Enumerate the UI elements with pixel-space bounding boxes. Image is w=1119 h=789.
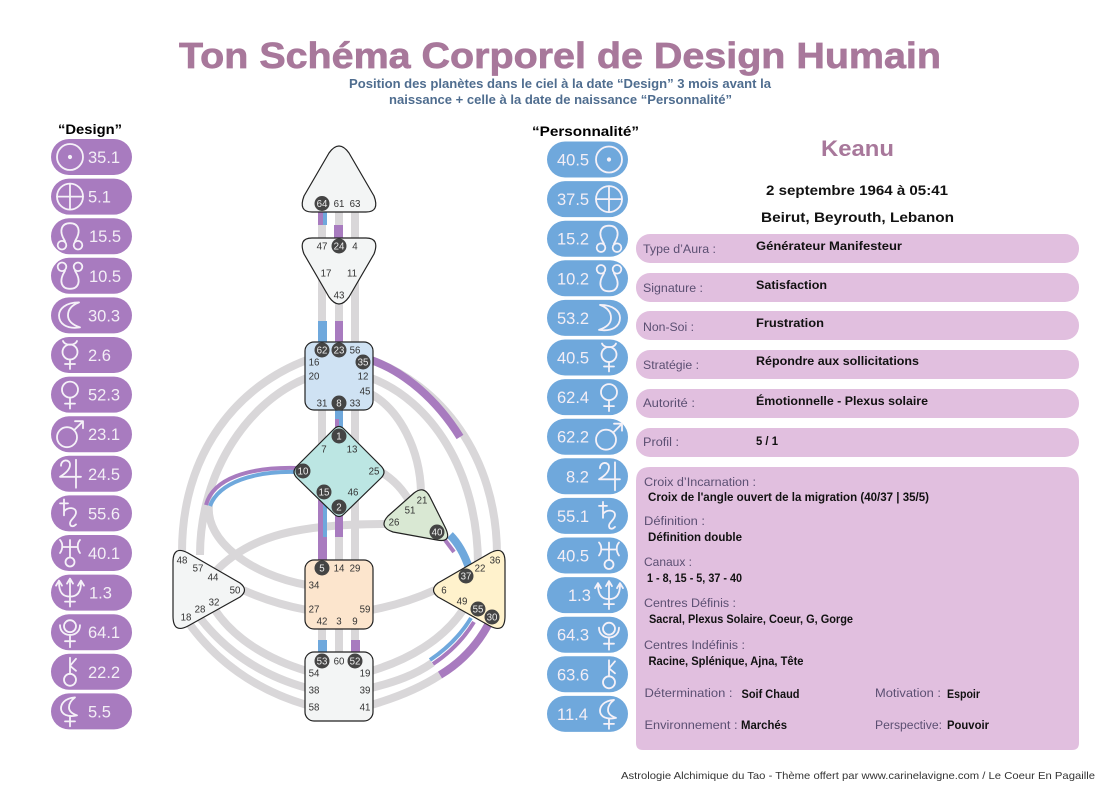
row: autorité: Autorité : <box>643 396 695 410</box>
gate numbers: 54 <box>309 668 320 680</box>
row: non-soi <box>636 311 1079 340</box>
pill: South Node 10.2: 10.2 <box>557 270 589 288</box>
pill: Jupiter 8.2 <box>547 458 628 494</box>
gate numbers: 25 <box>369 466 379 478</box>
pill: Venus 52.3 <box>51 377 132 413</box>
panel: details: Définition : <box>644 514 705 528</box>
column: Design planets <box>51 139 132 729</box>
subtitle: Position des planètes dans le ciel à la date “Design” 3 mois avant la <box>349 77 772 91</box>
panel: details: Détermination : <box>644 686 732 700</box>
pill: Saturn 55.1 <box>547 498 628 534</box>
pill: Pluto 64.3 <box>547 617 628 653</box>
pill: Lilith 11.4: 11.4 <box>557 706 588 724</box>
gate numbers: 29 <box>350 564 360 574</box>
row: profil: 5 / 1 <box>756 435 779 448</box>
row: type <box>636 234 1079 263</box>
pill: Moon 30.3 <box>51 297 132 333</box>
gate numbers: 30 <box>487 612 498 624</box>
panel: details: 1 - 8, 15 - 5, 37 - 40 <box>647 572 742 585</box>
gate numbers: 21 <box>417 496 427 506</box>
centre: root <box>305 652 373 721</box>
activation: gate 52 <box>351 640 360 653</box>
gate numbers: 18 <box>181 612 191 624</box>
panel: details: Racine, Splénique, Ajna, Tête <box>648 655 804 668</box>
pill: Uranus 40.1: 40.1 <box>88 545 120 563</box>
panel: details: Croix de l'angle ouvert de la migration (40/37 | 35/5) <box>648 491 929 504</box>
row: non-soi: Non-Soi : <box>643 320 694 334</box>
pill: South Node 10.5: 10.5 <box>89 268 121 286</box>
gate numbers: 48 <box>177 556 187 566</box>
row: stratégie: Stratégie : <box>643 358 699 372</box>
panel: details: Motivation : <box>875 686 941 700</box>
pill: Mercury 2.6 <box>51 337 132 373</box>
gate numbers: 11 <box>347 268 357 280</box>
activation: channel 1-8 <box>335 410 343 430</box>
gate numbers: 36 <box>490 556 500 566</box>
pill: Mercury 2.6: 2.6 <box>88 347 111 365</box>
pill: Mars 62.2 <box>547 419 628 455</box>
gate numbers: 43 <box>334 290 344 302</box>
pill: Chiron 22.2 <box>51 654 132 690</box>
gate numbers <box>177 196 500 714</box>
bodygraph chart <box>173 146 505 721</box>
gate numbers: 6 <box>441 586 447 596</box>
row: type: Type d’Aura : <box>643 242 716 256</box>
gate numbers: 42 <box>317 616 327 628</box>
gate numbers: 51 <box>405 506 415 516</box>
gate numbers: 62 <box>317 346 327 356</box>
pill: North Node 15.5 <box>51 218 132 254</box>
gate numbers: 14 <box>334 564 345 574</box>
centre: heart <box>384 490 448 540</box>
pill: Pluto 64.1 <box>51 614 132 650</box>
pill: Neptune 1.3: 1.3 <box>568 587 591 605</box>
pill: Mars 62.2: 62.2 <box>557 429 589 447</box>
gate numbers: 8 <box>336 398 342 410</box>
activation: gate 2 <box>335 510 343 537</box>
pill: Mars 23.1 <box>51 416 132 452</box>
gate numbers: 32 <box>209 598 219 608</box>
panel: details <box>636 467 1079 750</box>
profile name: Keanu <box>821 136 894 161</box>
gate numbers: 22 <box>475 564 485 574</box>
pill: Chiron 63.6 <box>547 656 628 692</box>
centre: sacral <box>305 560 373 629</box>
centre: head <box>302 146 376 212</box>
panel: details: Centres Définis : <box>644 596 736 610</box>
pill: Mars 23.1: 23.1 <box>88 426 120 444</box>
row: type: Générateur Manifesteur <box>756 240 903 253</box>
pill: Moon 30.3: 30.3 <box>88 307 120 325</box>
pill: Jupiter 8.2: 8.2 <box>566 468 589 486</box>
gate numbers: 50 <box>230 586 241 596</box>
pill: Saturn 55.1: 55.1 <box>557 508 589 526</box>
gate numbers: 19 <box>360 668 370 680</box>
centre: spleen <box>173 550 244 628</box>
pill: Earth 37.5: 37.5 <box>557 191 589 209</box>
panel: details: Croix d’Incarnation : <box>644 475 756 489</box>
panel: details: Définition double <box>648 531 743 544</box>
pill: Jupiter 24.5: 24.5 <box>88 466 120 484</box>
gate numbers: 10 <box>298 466 309 478</box>
gate numbers: 5 <box>319 564 325 574</box>
gate numbers: 7 <box>321 444 327 456</box>
row: profil: Profil : <box>643 435 679 449</box>
gate numbers: 4 <box>352 242 358 252</box>
row: signature: Signature : <box>643 281 703 295</box>
gate numbers: 2 <box>336 502 342 514</box>
subtitle <box>349 77 772 107</box>
gate numbers: 61 <box>334 199 344 210</box>
gate numbers: 23 <box>334 346 344 356</box>
pill: Chiron 63.6: 63.6 <box>557 666 589 684</box>
row: autorité: Émotionnelle - Plexus solaire <box>756 395 929 408</box>
pill: Jupiter 24.5 <box>51 456 132 492</box>
pill: North Node 15.2: 15.2 <box>557 231 589 249</box>
gate numbers: 49 <box>457 596 467 608</box>
birth place: Beirut, Beyrouth, Lebanon <box>761 209 954 225</box>
pill: South Node 10.2 <box>547 260 628 296</box>
pill: Pluto 64.1: 64.1 <box>88 624 120 642</box>
panel: details: Espoir <box>947 688 980 701</box>
pill: Sun 35.1: 35.1 <box>88 149 120 167</box>
gate numbers: 64 <box>317 199 328 210</box>
pill: Lilith 11.4 <box>547 696 628 732</box>
activation: gate 30 <box>440 625 488 675</box>
row: profil <box>636 428 1079 457</box>
pill: Earth 5.1 <box>51 179 132 215</box>
row: autorité <box>636 389 1079 418</box>
gate numbers: 37 <box>461 572 471 582</box>
pill: Uranus 40.5: 40.5 <box>557 548 589 566</box>
pill: Venus 62.4: 62.4 <box>557 389 589 407</box>
gate numbers: 39 <box>360 686 370 696</box>
pill: Uranus 40.1 <box>51 535 132 571</box>
gate numbers: 28 <box>195 604 205 616</box>
pill: Venus 62.4 <box>547 379 628 415</box>
gate numbers: 60 <box>334 656 345 668</box>
pill: Lilith 5.5: 5.5 <box>88 703 111 721</box>
pill: Neptune 1.3: 1.3 <box>89 585 112 603</box>
centre: ajna <box>302 238 376 304</box>
panel: details: Sacral, Plexus Solaire, Coeur, G, Gorge <box>649 613 854 626</box>
gate numbers: 57 <box>193 564 203 574</box>
pill: Pluto 64.3: 64.3 <box>557 627 589 645</box>
panel: details: Soif Chaud <box>742 688 800 701</box>
panel: details: Marchés <box>741 719 787 732</box>
pill: Mercury 40.5: 40.5 <box>557 350 589 368</box>
row: signature <box>636 273 1079 302</box>
gate numbers: 17 <box>321 268 331 280</box>
pill: Chiron 22.2: 22.2 <box>88 664 120 682</box>
panel: details: Perspective: <box>875 718 942 732</box>
gate numbers: 16 <box>309 358 319 368</box>
gate numbers: 33 <box>350 398 360 410</box>
row: non-soi: Frustration <box>756 317 824 330</box>
gate numbers: 45 <box>360 386 370 398</box>
gate numbers: 53 <box>317 656 327 668</box>
gate numbers: 56 <box>350 346 360 356</box>
centre: throat <box>305 342 373 410</box>
centre: solar plexus <box>434 550 505 628</box>
gate numbers: 59 <box>360 604 370 616</box>
pill: South Node 10.5 <box>51 258 132 294</box>
gate numbers: 52 <box>350 656 360 668</box>
panel: details: Centres Indéfinis : <box>644 638 745 652</box>
gate numbers: 15 <box>319 488 329 498</box>
gate numbers: 26 <box>389 518 399 528</box>
pill: Sun 40.5 <box>547 142 628 178</box>
activation: gate 62 <box>318 321 327 342</box>
subtitle: naissance + celle à la date de naissance “Personnalité” <box>389 93 732 107</box>
gate numbers: 63 <box>350 199 360 210</box>
pill: Neptune 1.3 <box>51 575 132 611</box>
panel: details: Environnement : <box>644 718 738 732</box>
channels <box>182 212 497 705</box>
activation: gate 55 <box>430 618 474 664</box>
activation: gate 53 <box>318 640 327 653</box>
gate numbers: 13 <box>347 444 357 456</box>
activation: gate 64 <box>318 212 327 225</box>
pill: North Node 15.2 <box>547 221 628 257</box>
gate numbers: 12 <box>358 372 368 382</box>
pill: Moon 53.2: 53.2 <box>557 310 589 328</box>
pill: Sun 35.1 <box>51 139 132 175</box>
pill: Earth 5.1: 5.1 <box>88 189 111 207</box>
pill: Lilith 5.5 <box>51 693 132 729</box>
pill: Moon 53.2 <box>547 300 628 336</box>
gate numbers: 58 <box>309 702 319 714</box>
birth date: 2 septembre 1964 à 05:41 <box>766 182 948 198</box>
activation: channel 37-40 <box>445 535 469 568</box>
gate numbers: 24 <box>334 242 345 252</box>
gate numbers: 46 <box>348 488 358 498</box>
gate numbers: 31 <box>317 398 327 410</box>
row: stratégie <box>636 350 1079 379</box>
row: signature: Satisfaction <box>756 279 827 292</box>
gate numbers: 55 <box>473 604 483 616</box>
pill: Uranus 40.5 <box>547 538 628 574</box>
row: stratégie: Répondre aux sollicitations <box>756 355 919 368</box>
panel: details: Pouvoir <box>947 719 989 732</box>
gate numbers: 47 <box>317 242 327 252</box>
gate numbers: 35 <box>358 358 368 368</box>
gate numbers: 1 <box>336 432 342 442</box>
gate numbers: 34 <box>309 580 320 592</box>
panel: details: Canaux : <box>644 555 692 569</box>
activation: channel 15-5 <box>318 500 327 560</box>
pill: Sun 40.5: 40.5 <box>557 152 589 170</box>
pill: Mercury 40.5 <box>547 340 628 376</box>
gate numbers: 44 <box>208 572 219 584</box>
gate numbers: 40 <box>432 528 443 538</box>
gate numbers: 9 <box>352 616 358 628</box>
pill: Neptune 1.3 <box>547 577 628 613</box>
gate numbers: 27 <box>309 604 319 616</box>
heading: Design: “Design” <box>58 121 122 137</box>
gate numbers: 41 <box>360 702 370 714</box>
activation: gate 24 <box>334 225 343 238</box>
centre: G <box>294 426 384 516</box>
activation: gate 10 <box>206 468 296 506</box>
column: Personnalité planets <box>547 142 628 732</box>
pill: Saturn 55.6 <box>51 495 132 531</box>
footer: Astrologie Alchimique du Tao - Thème offert par www.carinelavigne.com / Le Coeur En Pagaille <box>621 770 1095 782</box>
gate numbers: 3 <box>336 616 342 628</box>
pill: North Node 15.5: 15.5 <box>89 228 121 246</box>
pill: Earth 37.5 <box>547 181 628 217</box>
gate numbers: 38 <box>309 686 319 696</box>
pill: Saturn 55.6: 55.6 <box>88 505 120 523</box>
activation: gate 35 <box>371 360 460 437</box>
heading: Personnalité: “Personnalité” <box>532 123 639 139</box>
title: Ton Schéma Corporel de Design Humain <box>179 35 941 76</box>
pill: Venus 52.3: 52.3 <box>88 387 120 405</box>
gate numbers: 20 <box>309 372 320 382</box>
activation: gate 23 <box>335 321 343 342</box>
